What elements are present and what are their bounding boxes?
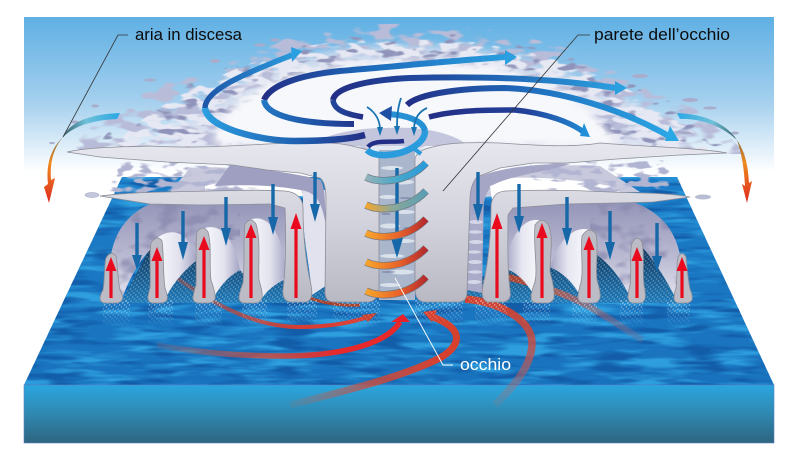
small stray cloud right bbox=[695, 194, 711, 200]
small stray cloud left bbox=[85, 192, 99, 198]
band E head bbox=[580, 123, 590, 137]
band E bbox=[429, 110, 586, 134]
dark cloud flecks bbox=[90, 32, 735, 152]
inflow c bbox=[411, 108, 427, 136]
left rainband curtains bbox=[111, 165, 327, 298]
spiral rings around the eye bbox=[366, 163, 426, 295]
streaks beside right wall bbox=[467, 210, 483, 284]
white lobe right bay 2 bbox=[550, 229, 589, 292]
eye column bbox=[379, 150, 415, 300]
band A head bbox=[291, 47, 302, 62]
sky background bbox=[24, 17, 774, 177]
leader line bbox=[63, 35, 128, 137]
red inflow arrows on the sea bbox=[157, 277, 643, 405]
right eyewall and upper shelf bbox=[415, 143, 727, 302]
ocean surface bbox=[24, 177, 774, 385]
light lower strip bbox=[412, 147, 421, 154]
band C head bbox=[615, 81, 627, 95]
right arrow upper part bbox=[677, 113, 737, 140]
right lower clouds bbox=[470, 165, 640, 198]
shadow under left rainbands bbox=[122, 248, 330, 303]
band A lower bbox=[205, 108, 365, 141]
label: aria in discesa bbox=[63, 25, 243, 137]
curtain backing left bbox=[111, 200, 290, 298]
white lobe bay 2 bbox=[205, 227, 240, 295]
left white cloud bbox=[205, 180, 303, 196]
left lower puffs bbox=[105, 160, 260, 194]
leader line bbox=[443, 35, 590, 191]
band D head bbox=[665, 126, 679, 141]
inflow arrow 1 bbox=[177, 278, 370, 327]
white lobe bay 3 bbox=[250, 218, 287, 298]
inflow arrow 5 bbox=[507, 277, 643, 340]
inflow arrow 2 bbox=[157, 322, 400, 356]
label text: parete dell’occhio bbox=[594, 25, 730, 44]
top arrow band bbox=[388, 114, 425, 131]
eye column streaks bbox=[379, 166, 415, 287]
right white cloud bbox=[480, 178, 620, 192]
central downward arrow bbox=[391, 168, 403, 258]
band A upper bbox=[205, 55, 292, 108]
white cloud core bbox=[215, 61, 615, 146]
blue downdraft arrows bbox=[132, 172, 662, 272]
label: parete dell'occhio bbox=[443, 25, 730, 191]
right lower puffs bbox=[530, 160, 690, 194]
left arrow lower part bbox=[44, 137, 63, 203]
left inner shelf and tall rainband bbox=[100, 190, 312, 302]
inflow arrow 3 head bbox=[423, 310, 437, 322]
right rainband pillars bbox=[531, 220, 692, 303]
lavender upper arch right bbox=[470, 164, 570, 215]
ring 5 bbox=[366, 277, 426, 295]
band B lower bbox=[264, 100, 354, 124]
inflow arrow 1 head bbox=[362, 313, 377, 322]
light cloud puffs bbox=[110, 38, 715, 152]
mottling on the left curtain bbox=[111, 200, 240, 298]
back navy band bbox=[368, 141, 404, 147]
left rainband pillars bbox=[100, 220, 262, 303]
band C top bbox=[333, 77, 616, 100]
inflow arrow 3 bbox=[290, 316, 456, 405]
band D bbox=[407, 88, 672, 138]
label text: aria in discesa bbox=[135, 25, 243, 44]
water texture dark bbox=[24, 177, 774, 385]
ring 3 bbox=[366, 219, 426, 237]
upper cloud disk bbox=[49, 24, 745, 154]
curtain beside left wall bbox=[303, 190, 327, 295]
cloud behind the eye bbox=[312, 128, 466, 146]
white lobe bay 1 bbox=[157, 232, 197, 295]
label text: occhio bbox=[460, 355, 511, 374]
left eyewall and upper shelf bbox=[67, 142, 379, 302]
label: occhio bbox=[395, 278, 511, 374]
white lobe right bay 1 bbox=[505, 220, 542, 292]
right rainband curtains bbox=[467, 164, 682, 295]
stray puffs bbox=[49, 38, 739, 144]
curtain beside right wall bbox=[467, 190, 484, 293]
inflow behind left wall bbox=[310, 298, 360, 305]
ocean block bbox=[24, 177, 774, 443]
white arch right bbox=[490, 180, 585, 200]
inflow a bbox=[367, 107, 383, 136]
hatched rain patches bbox=[103, 300, 690, 325]
inflow arrow 4 bbox=[465, 299, 532, 405]
curtain backing right bbox=[505, 203, 682, 295]
side arrow right bbox=[677, 113, 752, 203]
inflow b bbox=[394, 98, 401, 135]
band B head bbox=[505, 50, 517, 65]
band B top bbox=[264, 57, 506, 100]
front blue band bbox=[367, 131, 425, 155]
small inflow arrows into the eye bbox=[367, 98, 427, 136]
lavender upper arch left bbox=[215, 165, 326, 225]
ring 2 bbox=[366, 191, 426, 209]
top arrow head bbox=[379, 106, 392, 121]
mottling on the right curtain bbox=[590, 203, 682, 295]
ocean front face bbox=[24, 385, 774, 443]
leader line bbox=[395, 278, 453, 365]
large spiral outflow arrows bbox=[205, 47, 679, 141]
left lower clouds bbox=[170, 167, 325, 198]
red updraft arrows bbox=[106, 213, 688, 298]
inflow arrow 2 head bbox=[391, 314, 410, 322]
water texture light bbox=[24, 177, 774, 385]
ring 4 bbox=[366, 248, 426, 266]
shadow under right rainbands bbox=[467, 245, 676, 303]
ring 1 bbox=[366, 163, 426, 181]
eye column dark flecks bbox=[381, 177, 413, 291]
right arrow lower part bbox=[737, 140, 752, 203]
right inner shelf and tall rainband bbox=[482, 190, 690, 302]
cloud haze bbox=[165, 45, 690, 150]
grey cloud puffs bbox=[62, 24, 745, 154]
lower cloud layer bbox=[85, 160, 711, 200]
hatching inside the arches bbox=[122, 248, 676, 303]
left arrow upper part bbox=[63, 113, 120, 137]
side arrow left bbox=[44, 113, 120, 203]
eye column fill bbox=[379, 150, 415, 300]
band C lower bbox=[333, 100, 363, 117]
top spiral of the eye bbox=[367, 106, 425, 155]
